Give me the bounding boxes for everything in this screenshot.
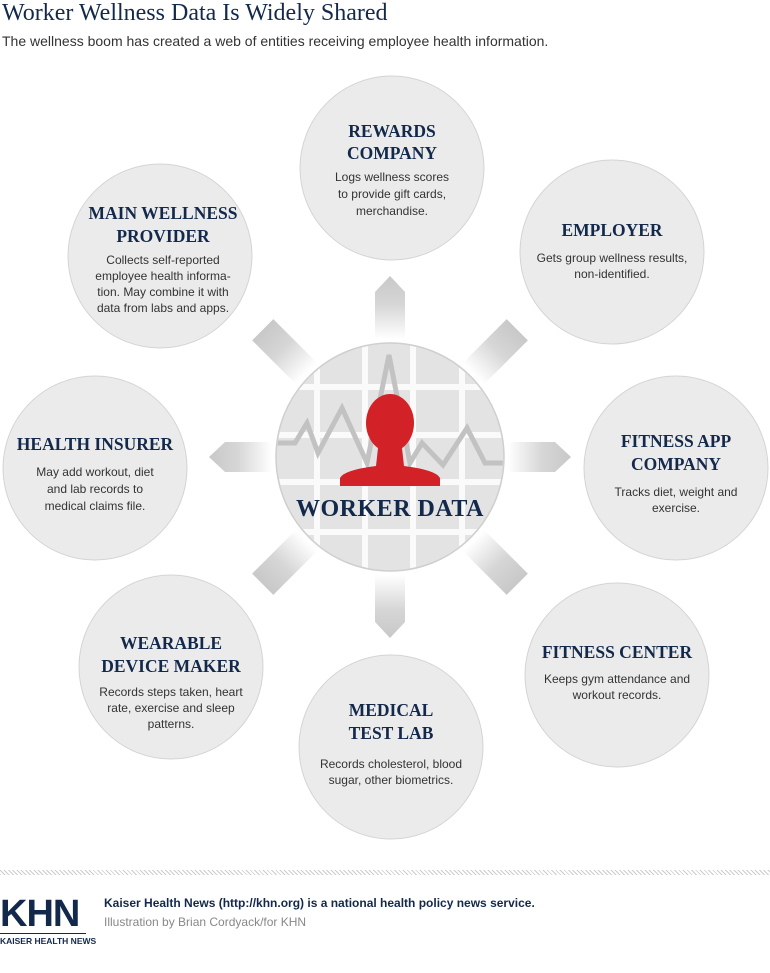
- footer logo: KHN: KAISER HEALTH NEWS: [0, 936, 96, 946]
- footer logo: KHN: [0, 893, 96, 946]
- circle: main wellness provider: MAIN WELLNESS: [89, 203, 237, 223]
- circle: fitness app company: FITNESS APP: [621, 431, 731, 451]
- circle: main wellness provider: [68, 164, 252, 348]
- footer text: [104, 896, 535, 929]
- circle: health insurer: and lab records to: [47, 482, 143, 496]
- footer text: Illustration by Brian Cordyack/for KHN: [104, 915, 306, 929]
- circle: medical test lab: sugar, other biometrics.: [329, 773, 453, 787]
- footer logo: KHN: KHN: [0, 893, 79, 935]
- circle: employer: Gets group wellness results,: [537, 251, 687, 265]
- circle: health insurer: [3, 376, 187, 560]
- circle: fitness app company: exercise.: [652, 501, 700, 515]
- circle: rewards company: REWARDS: [348, 121, 436, 141]
- circle: wearable device maker: rate, exercise and sleep: [107, 701, 235, 715]
- circle: employer: EMPLOYER: [561, 220, 663, 240]
- circle: main wellness provider: Collects self-reported: [106, 253, 220, 267]
- circle: health insurer: May add workout, diet: [36, 465, 154, 479]
- diagram: [2, 76, 768, 840]
- circle: wearable device maker: DEVICE MAKER: [101, 656, 241, 676]
- circle: rewards company: merchandise.: [356, 204, 428, 218]
- title: Worker Wellness Data Is Widely Shared: [2, 0, 388, 26]
- circle: medical test lab: MEDICAL: [349, 700, 433, 720]
- circle: medical test lab: [299, 655, 483, 839]
- circle: employer: non-identified.: [574, 267, 650, 281]
- circle: wearable device maker: patterns.: [148, 717, 194, 731]
- circle: wearable device maker: [79, 575, 263, 759]
- icon: person: [340, 394, 440, 486]
- circle: main wellness provider: employee health informa-: [95, 269, 231, 283]
- circle: wearable device maker: WEARABLE: [120, 633, 222, 653]
- subtitle: The wellness boom has created a web of entities receiving employee health information.: [2, 33, 548, 49]
- circle: fitness center: FITNESS CENTER: [542, 642, 692, 662]
- circle: fitness app company: COMPANY: [631, 454, 721, 474]
- circle: rewards company: to provide gift cards,: [338, 187, 446, 201]
- circle: fitness center: workout records.: [572, 688, 661, 702]
- footer text: Kaiser Health News (http://khn.org) is a national health policy news service.: [104, 896, 535, 910]
- circle: fitness app company: Tracks diet, weight and: [615, 485, 737, 499]
- circle: rewards company: COMPANY: [347, 143, 437, 163]
- circle: fitness app company: [584, 376, 768, 560]
- circle: main wellness provider: PROVIDER: [116, 226, 210, 246]
- circle: fitness center: [525, 583, 709, 767]
- circle: rewards company: Logs wellness scores: [335, 170, 449, 184]
- circle: medical test lab: Records cholesterol, blood: [320, 757, 462, 771]
- circle: main wellness provider: tion. May combine it with: [97, 285, 229, 299]
- arrows: [209, 276, 571, 638]
- circle: main wellness provider: data from labs and apps.: [97, 301, 229, 315]
- circle: employer: [520, 160, 704, 344]
- circle: health insurer: medical claims file.: [45, 499, 145, 513]
- circle: fitness center: Keeps gym attendance and: [544, 672, 690, 686]
- circle: medical test lab: TEST LAB: [349, 723, 434, 743]
- circle: health insurer: HEALTH INSURER: [17, 434, 174, 454]
- circle: wearable device maker: Records steps taken, heart: [99, 685, 243, 699]
- center label: WORKER DATA: [296, 496, 484, 522]
- circle: rewards company: [300, 76, 484, 260]
- center circle: worker data: [275, 342, 505, 572]
